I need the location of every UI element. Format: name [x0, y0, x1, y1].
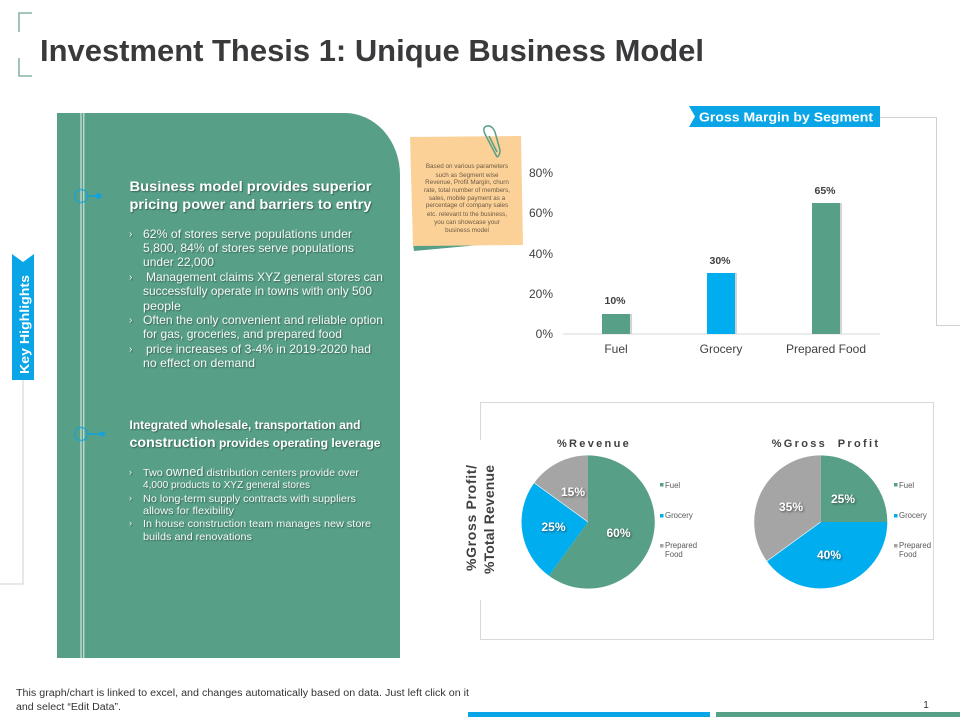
sticky note text: percentage of company sales [426, 202, 508, 209]
footnote: and select “Edit Data”. [16, 702, 121, 713]
y axis labels: 80% [529, 166, 553, 180]
sticky note text: such as Segment wise [436, 172, 499, 179]
pie chart: revenue [522, 438, 697, 589]
bullets: operating leverage: › [129, 467, 132, 477]
x axis labels [604, 342, 866, 356]
bullets: pricing power: › [129, 344, 132, 355]
pie chart: gross profit: 25% [831, 492, 855, 506]
x axis labels: Prepared Food [786, 342, 866, 356]
marker: first section [74, 190, 101, 202]
bullets: pricing power: 5,800, 84% of stores serve populations [143, 241, 354, 255]
bullets: operating leverage: allows for flexibility [143, 505, 235, 517]
pie chart: revenue: %Revenue [557, 438, 631, 450]
vertical axis label [463, 465, 497, 574]
pie chart: gross profit [754, 438, 931, 588]
footer bar: blue [468, 712, 710, 717]
pie chart: gross profit: 40% [817, 548, 841, 562]
sticky note text: Based on various parameters [426, 163, 508, 170]
key highlights ribbon: Key Highlights [17, 275, 32, 374]
y axis labels: 40% [529, 247, 553, 261]
sticky note [410, 126, 523, 251]
marker: second section [74, 428, 104, 440]
gross margin frame [880, 118, 960, 326]
page number: 1 [923, 700, 929, 711]
bullets: operating leverage: 4,000 products to XYZ general stores [143, 479, 310, 491]
bullets: operating leverage [129, 465, 371, 543]
footnote [16, 688, 469, 713]
heading: pricing power: pricing power and barriers to entry [130, 197, 372, 212]
bullets: pricing power: no effect on demand [143, 356, 255, 370]
y axis labels [529, 166, 553, 341]
bullets: pricing power: price increases of 3-4% in 2019-2020 had [146, 342, 371, 356]
pie chart: gross profit: 35% [779, 500, 803, 514]
bullets: pricing power: Often the only convenient and reliable option [143, 313, 383, 327]
pie chart: revenue: 15% [561, 485, 585, 499]
bullets: pricing power [129, 227, 383, 370]
sticky note text: sales, mobile payment as a [429, 195, 506, 202]
legend: revenue: Fuel [665, 481, 680, 490]
pie chart: revenue: 60% [606, 526, 631, 540]
legend: revenue: Grocery [665, 511, 693, 520]
heading: operating leverage: Integrated wholesale, transportation and [130, 420, 360, 432]
sticky note text: Revenue, Profit Margin, churn [425, 179, 509, 186]
bullets: pricing power: for gas, groceries, and prepared food [143, 327, 342, 341]
pie chart: gross profit: %Gross Profit [772, 438, 880, 450]
pie charts frame [480, 402, 934, 640]
key highlights ribbon [12, 254, 34, 380]
sticky note text [424, 163, 510, 234]
bar: prepared food [812, 185, 842, 334]
bullets: operating leverage: No long-term supply contracts with suppliers [143, 493, 356, 505]
y axis labels: 60% [529, 206, 553, 220]
heading: operating leverage [130, 420, 380, 450]
panel: key highlights [57, 113, 400, 658]
bullets: operating leverage: › [129, 518, 132, 528]
legend: gross profit: Grocery [899, 511, 927, 520]
y axis labels: 0% [536, 327, 553, 341]
y axis labels: 20% [529, 287, 553, 301]
legend: revenue: Food [665, 550, 683, 559]
footnote: This graph/chart is linked to excel, and changes automatically based on data. Just left click on it [16, 688, 469, 699]
gross margin ribbon: Gross Margin by Segment [699, 110, 874, 124]
bullets: pricing power: people [143, 299, 181, 313]
legend: gross profit: Fuel [899, 481, 914, 490]
pie chart: revenue: 25% [541, 520, 566, 534]
sticky note text: business model [445, 227, 489, 234]
bullets: pricing power: successfully operate in towns with only 500 [143, 284, 372, 298]
bar: fuel [602, 295, 632, 334]
legend: gross profit [894, 481, 931, 559]
sticky note text: rate, total number of members, [424, 187, 510, 194]
bar: grocery: 30% [709, 255, 731, 267]
bar: fuel: 10% [604, 295, 626, 307]
bullets: pricing power: › [129, 229, 132, 240]
bullets: operating leverage: builds and renovations [143, 531, 252, 543]
bullets: pricing power: Management claims XYZ general stores can [146, 270, 383, 284]
vertical axis label: %Gross Profit/ [463, 465, 479, 571]
bullets: operating leverage: › [129, 493, 132, 503]
bar: grocery [707, 255, 737, 334]
x axis labels: Fuel [604, 342, 628, 356]
bar chart: gross margin by segment [529, 166, 880, 356]
title: Investment Thesis 1: Unique Business Model [40, 33, 704, 68]
heading: pricing power [130, 179, 372, 212]
x axis labels: Grocery [700, 342, 742, 356]
key highlights connector [0, 380, 23, 584]
legend: gross profit: Food [899, 550, 917, 559]
bullets: operating leverage: Two owned distribution centers provide over [143, 465, 360, 479]
bar: prepared food: 65% [814, 185, 836, 197]
icon: paper clip [484, 126, 500, 157]
gross margin ribbon [689, 106, 880, 127]
vertical axis label: %Total Revenue [481, 465, 497, 574]
legend: revenue: Prepared [665, 541, 697, 550]
sticky note text: etc. relevant to the business, [427, 211, 507, 218]
legend: revenue [660, 481, 697, 559]
bullets: operating leverage: In house construction team manages new store [143, 518, 371, 530]
bullets: pricing power: 62% of stores serve populations under [143, 227, 352, 241]
footer bar: green [716, 712, 960, 717]
title bracket [19, 13, 32, 76]
sticky note text: you can showcase your [434, 219, 500, 226]
bullets: pricing power: under 22,000 [143, 255, 214, 269]
bullets: pricing power: › [129, 272, 132, 283]
legend: gross profit: Prepared [899, 541, 931, 550]
bullets: pricing power: › [129, 315, 132, 326]
heading: operating leverage: construction provides operating leverage [130, 435, 380, 450]
heading: pricing power: Business model provides superior [130, 179, 372, 194]
